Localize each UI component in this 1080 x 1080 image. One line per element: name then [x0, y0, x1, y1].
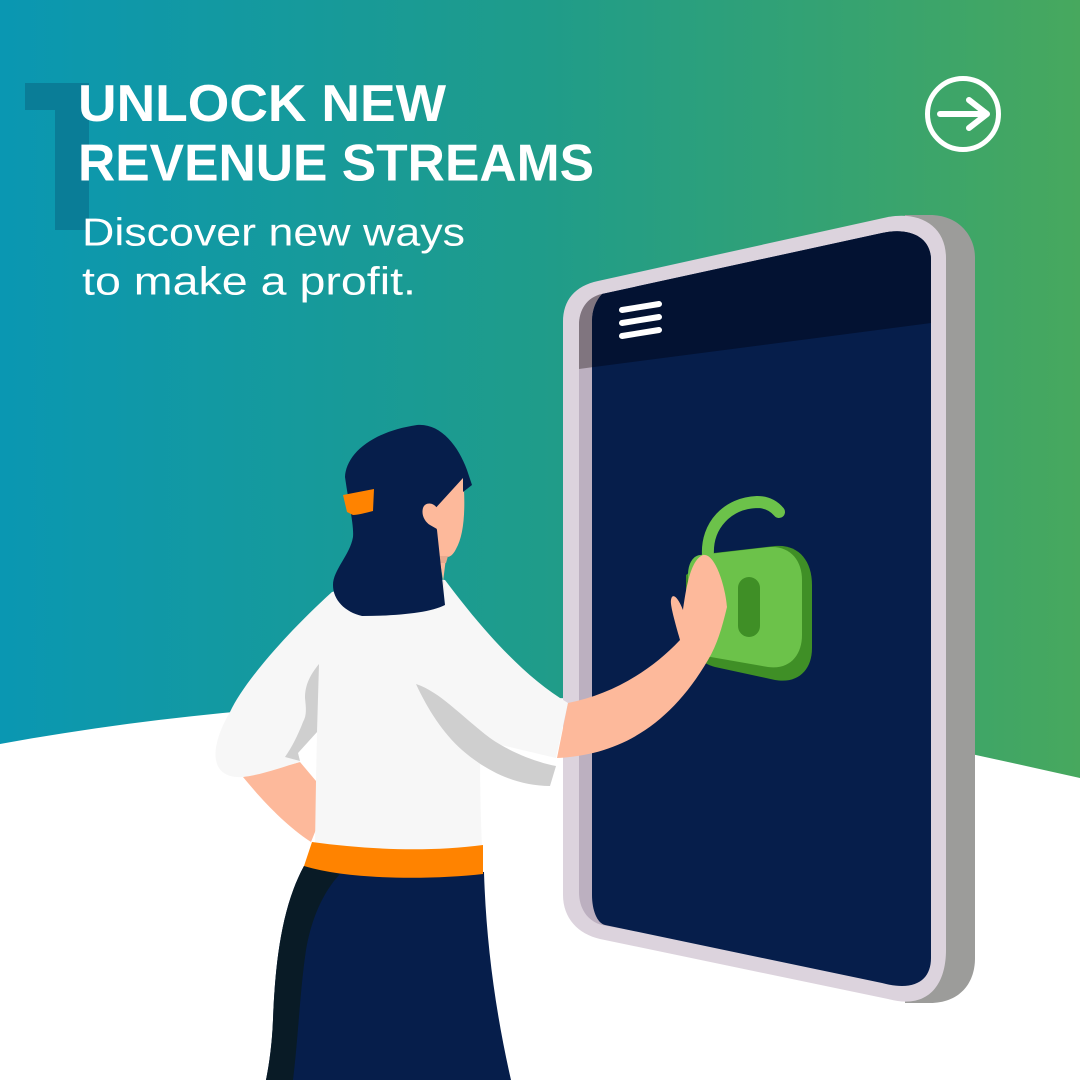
icon: open padlock	[686, 502, 812, 681]
phone frame	[563, 216, 946, 1002]
gradient background	[0, 0, 1080, 800]
lock face	[688, 547, 802, 667]
subtitle: Discover new ways	[82, 212, 465, 254]
hair tie	[343, 489, 374, 515]
shirt	[216, 575, 568, 850]
phone top bar	[592, 231, 931, 367]
phone	[563, 215, 975, 1003]
shirt fold right	[416, 684, 556, 786]
face	[425, 474, 464, 557]
neck	[438, 550, 447, 592]
white floor curve	[0, 698, 1080, 1080]
subtitle: to make a profit.	[82, 260, 416, 304]
large number 1	[25, 83, 89, 230]
phone side shadow	[905, 215, 975, 1003]
arm skin	[557, 555, 727, 758]
title: UNLOCK NEW	[78, 75, 447, 133]
hair	[333, 425, 472, 616]
back arm skin	[243, 762, 317, 842]
lock back	[686, 546, 812, 681]
belt	[304, 842, 483, 878]
phone top bar edge	[579, 294, 602, 369]
skirt	[266, 866, 511, 1080]
neck shadow	[439, 556, 448, 563]
subtitle	[82, 212, 465, 304]
icon: menu lines	[622, 304, 659, 336]
icon: arrow in circle	[928, 78, 998, 150]
title: REVENUE STREAMS	[78, 134, 594, 192]
keyhole	[738, 577, 760, 637]
phone inner edge	[579, 294, 640, 932]
ear	[422, 504, 444, 529]
shackle	[708, 502, 779, 556]
person	[216, 425, 727, 1080]
shirt fold left	[285, 664, 319, 761]
skirt shadow	[266, 866, 340, 1080]
title	[78, 75, 594, 192]
phone screen	[592, 231, 931, 986]
